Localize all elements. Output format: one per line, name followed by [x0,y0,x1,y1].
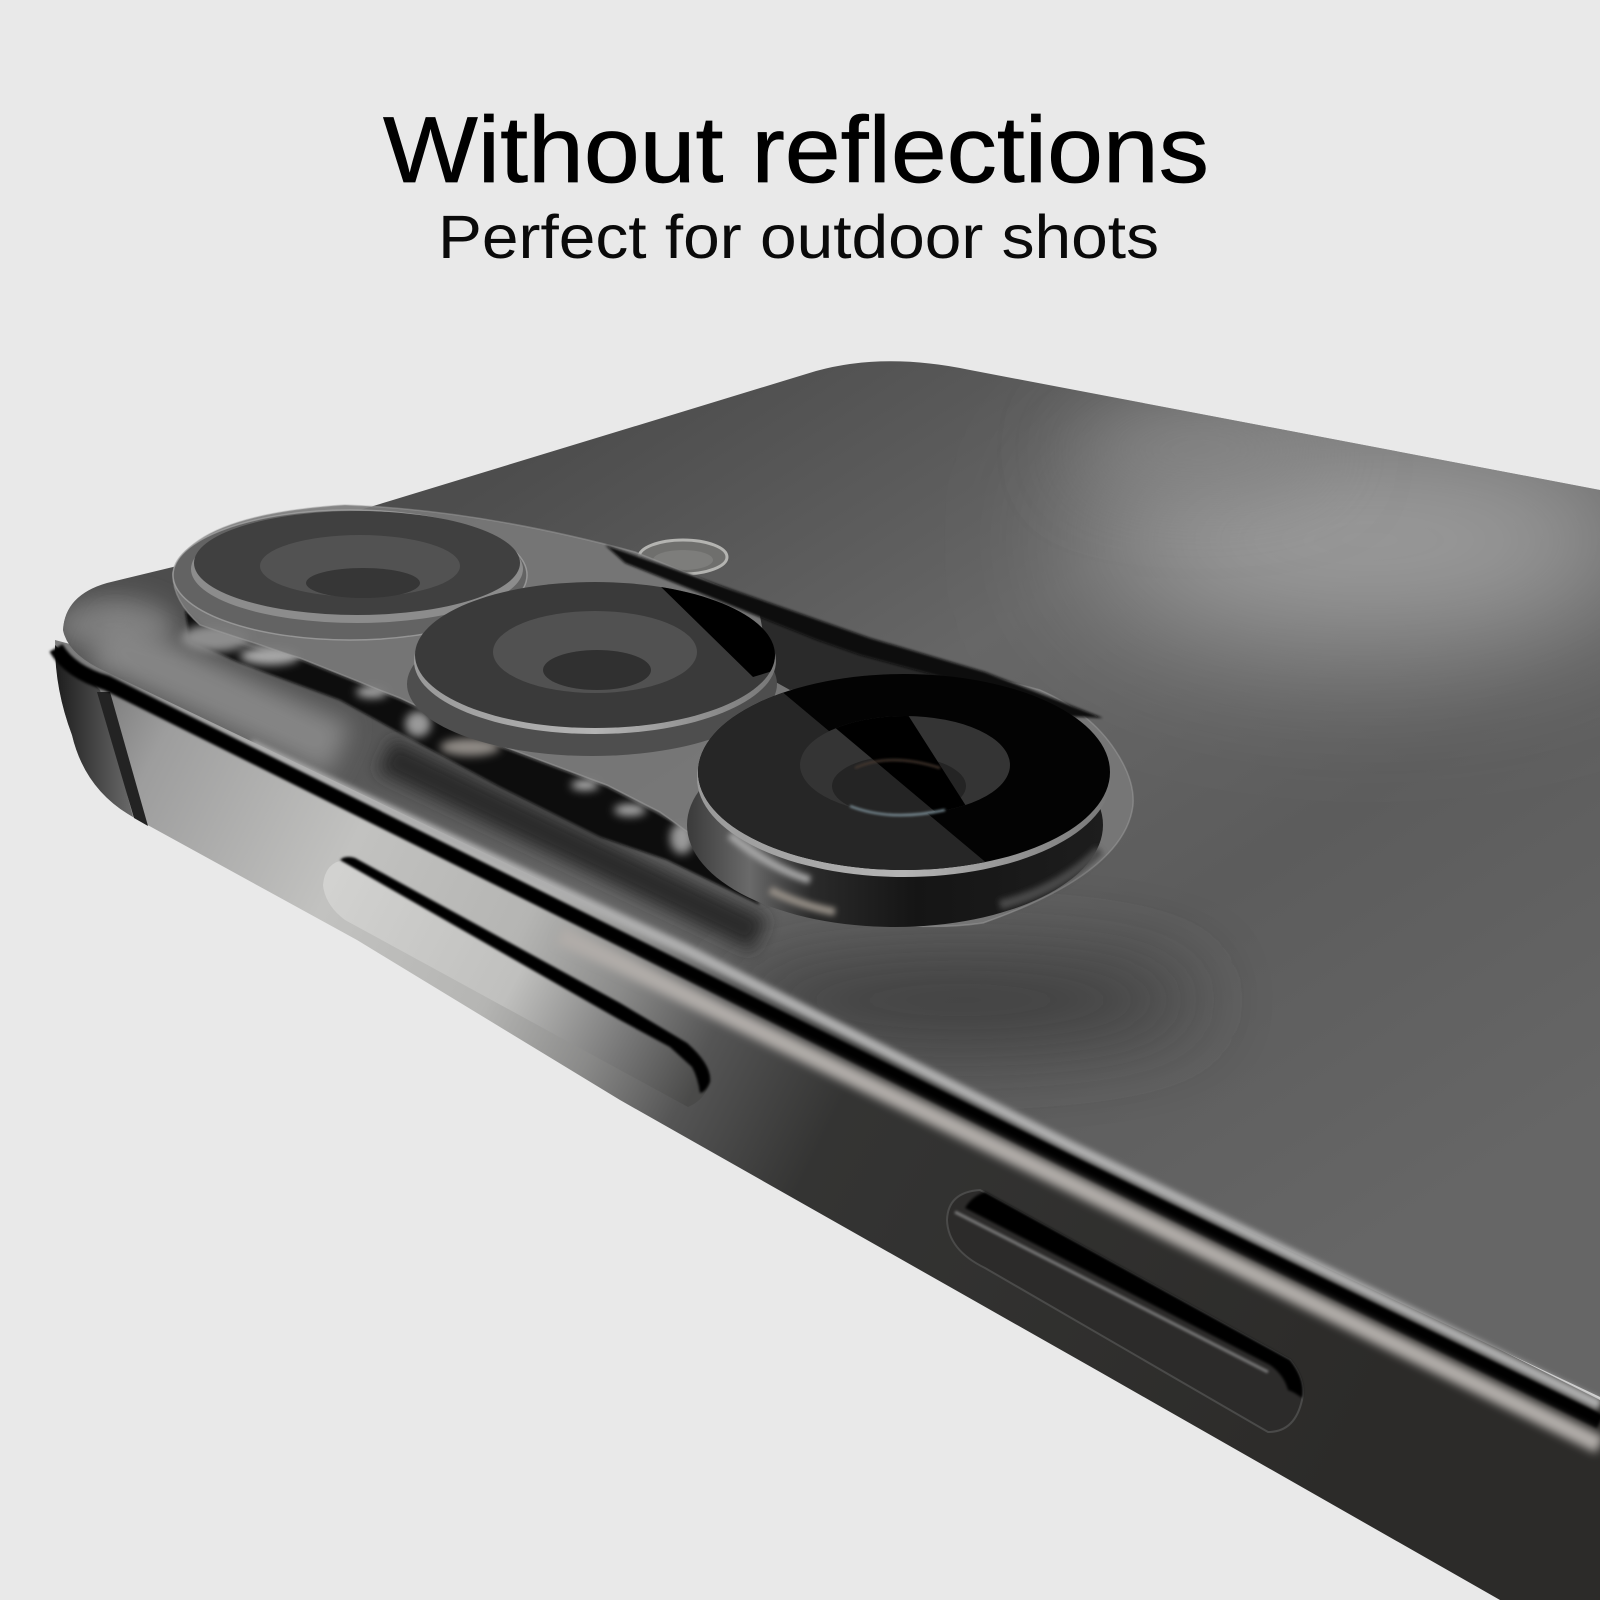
lens 2 disc [415,582,775,728]
button: lower side key [947,1190,1303,1432]
lens 1 disc [194,511,520,615]
title: Without reflections [383,97,1209,202]
glass plate [173,505,1133,926]
lens 3 barrel highlights [730,835,1100,912]
back surface soft shading [55,415,1600,1045]
key highlight line [955,1212,1268,1372]
lens 3 reflection band [836,716,966,812]
metal strip under glass [185,610,760,905]
lens 2 glass base [407,612,777,756]
lens 3 lit side [698,692,985,870]
phone [55,361,1600,1600]
corner dark section of frame [55,645,133,817]
lens 1 rim [191,515,523,623]
phone back surface [63,361,1600,1397]
lens 2 core [543,650,651,690]
subtitle: Perfect for outdoor shots [438,203,1159,271]
seam black line [56,648,1600,1422]
key slot [965,1192,1303,1398]
lens 3 inner [800,716,1010,814]
black mask edge [605,545,1103,718]
lens 2 inner [493,611,697,693]
lens 3 core [832,756,966,816]
lens 1 core [306,568,420,598]
dark wedge beside lens 3 [757,600,1010,700]
lens 1 glass ring [173,510,527,640]
key face [323,860,710,1107]
surface light edge band [250,745,1600,1405]
lens 3 disc [698,674,1110,870]
phone side frame [55,640,1600,1600]
key face [947,1190,1303,1432]
lens 2 rim [414,588,776,734]
side chrome band [560,935,1600,1445]
camera module [173,505,1133,927]
lens 2 reflection band [661,587,775,677]
button: upper side key [323,857,710,1107]
lens 1 inner [260,535,460,597]
key slot [340,857,710,1093]
flash [639,540,727,574]
lens 3 rim [697,679,1111,877]
chrome glints [181,624,694,854]
antenna band [97,692,148,826]
lens 3 barrel [687,723,1103,927]
lens 3 core rims [850,760,945,815]
